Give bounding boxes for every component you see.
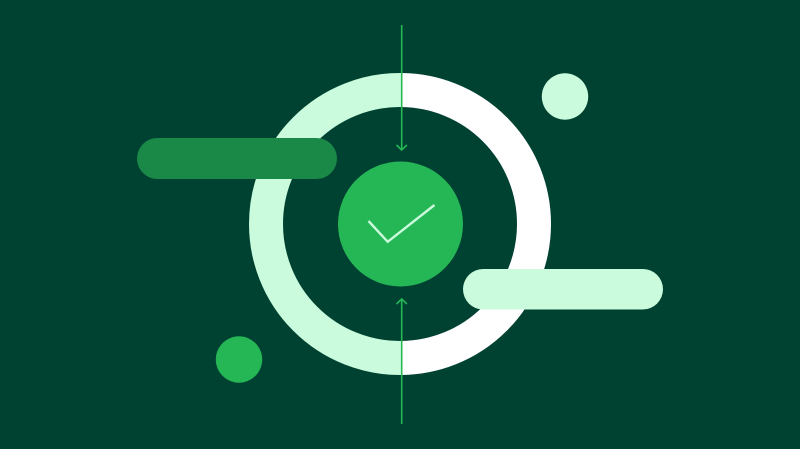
dark green pill <box>137 138 337 179</box>
central green circle <box>338 162 463 286</box>
top right light circle <box>542 73 588 120</box>
infographic canvas <box>137 25 663 424</box>
arrow: bottom pointing up <box>396 299 407 424</box>
icon: check mark <box>368 205 434 242</box>
bottom left green circle <box>216 336 262 383</box>
light green pill <box>463 269 663 310</box>
arrow: top pointing down <box>396 25 407 150</box>
ring: two-tone circle <box>266 90 534 358</box>
